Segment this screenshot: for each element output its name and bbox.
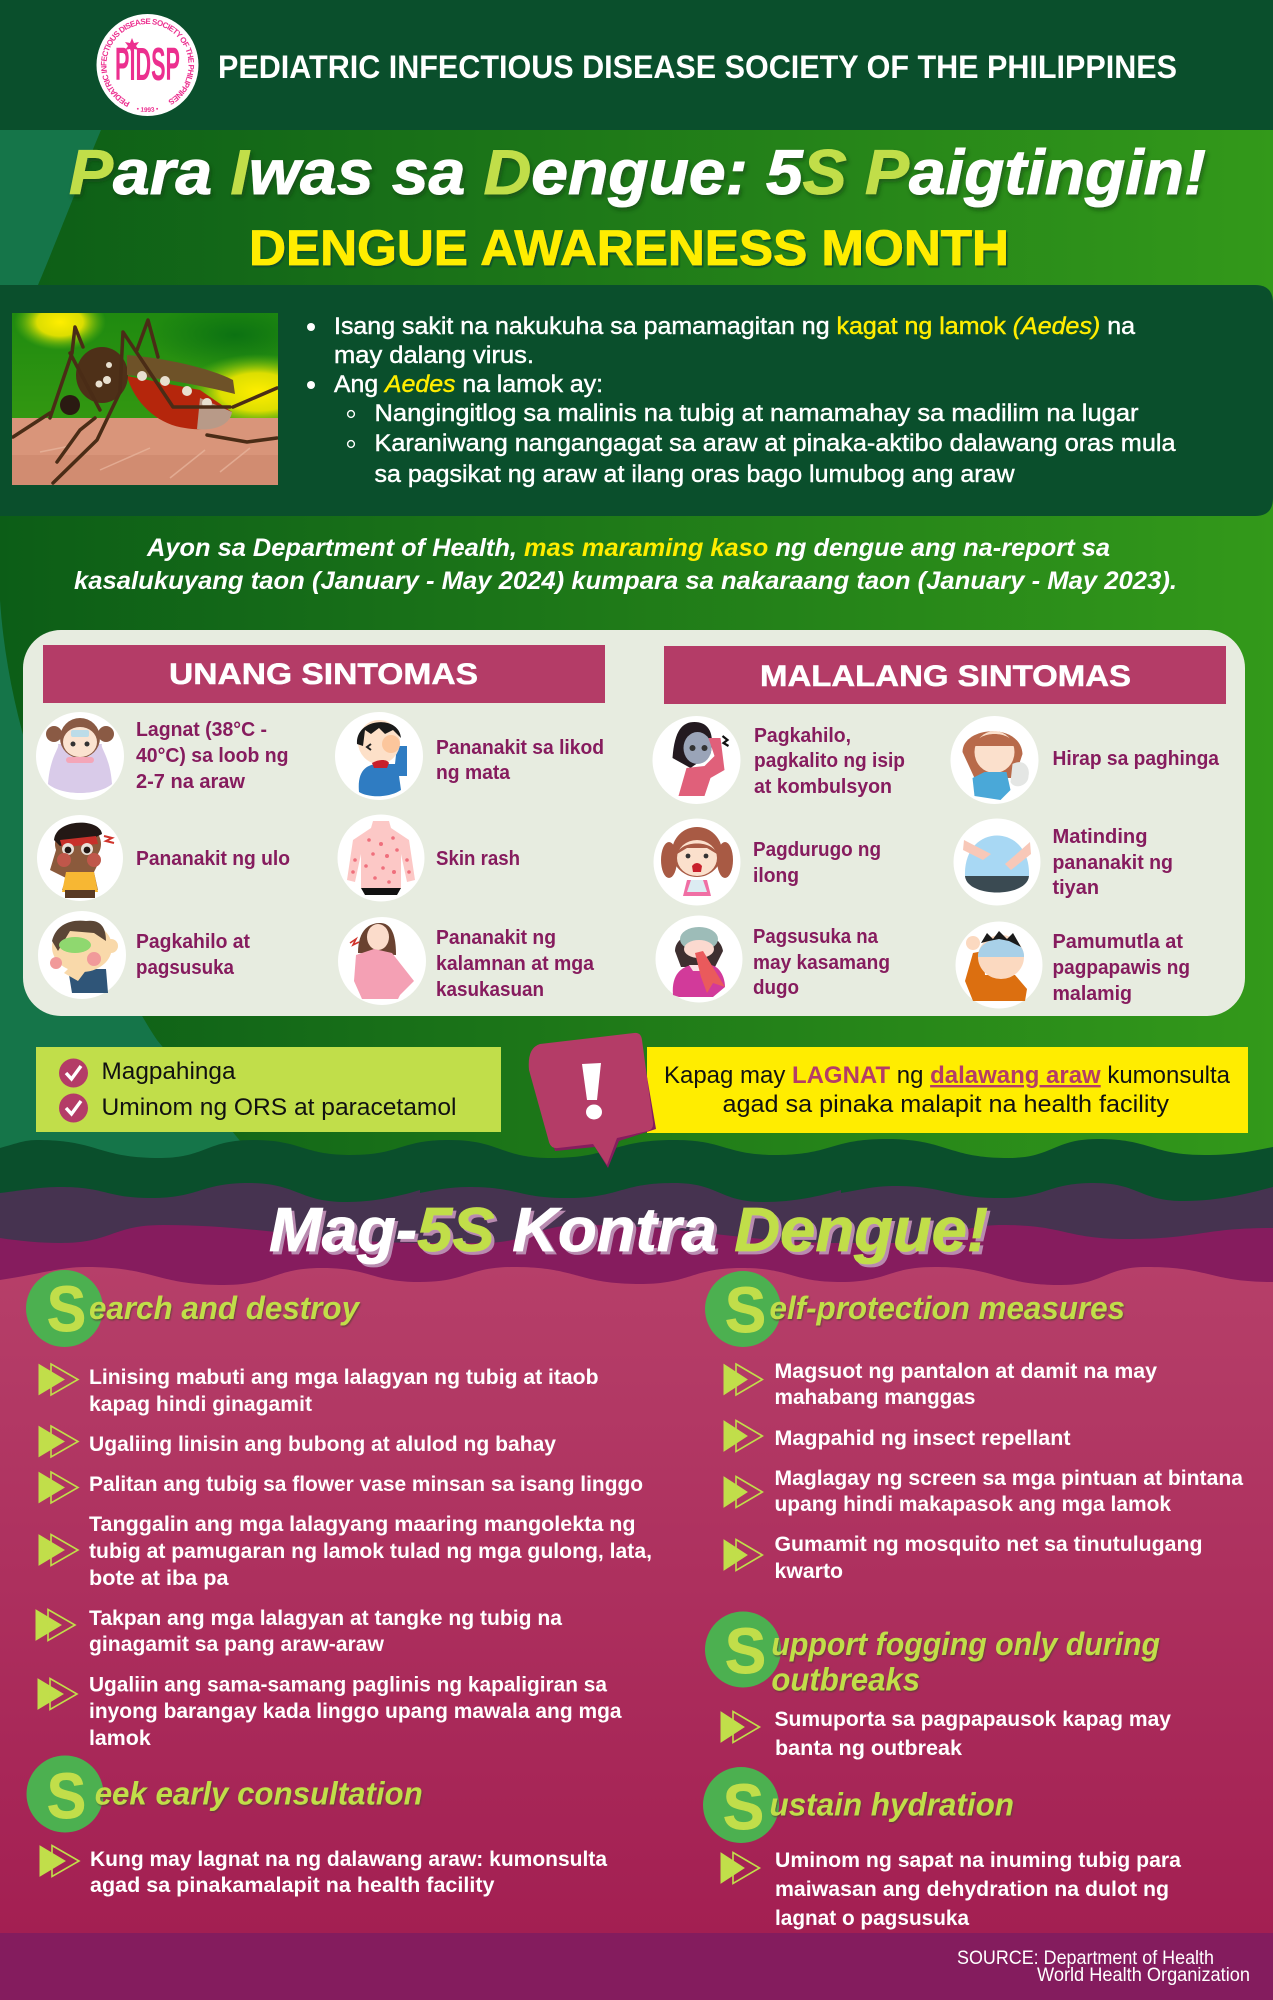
bullet text: banta ng outbreak [775, 1737, 962, 1760]
text: nosebleed [753, 838, 881, 887]
text: pain behind the eyes [436, 736, 604, 784]
heading: outbreaks [771, 1662, 920, 1698]
wave: dark purple [0, 1183, 1273, 1400]
bullet text: Magsuot ng pantalon at damit na may [774, 1360, 1157, 1383]
panel: what is dengue [0, 285, 1273, 516]
bullet list: may dalang virus. [334, 342, 534, 369]
heading [771, 1626, 1160, 1698]
bullet text: kapag hindi ginagamit [89, 1393, 312, 1416]
section: seek early consultation [26, 1756, 607, 1897]
bullet text: Ugaliin ang sama-samang paglinis ng kapaligiran sa [89, 1674, 607, 1696]
icon: S badge: S [47, 1273, 86, 1345]
icon: arrow [40, 1846, 79, 1876]
heading: elf-protection measures [770, 1290, 1125, 1326]
icon: boy with nausea [38, 911, 126, 999]
bullet text: inyong barangay kada linggo upang mawala ang mga [89, 1700, 622, 1723]
icon: arrow [721, 1852, 760, 1884]
icon: S badge: S [725, 1274, 766, 1346]
icon: girl with nosebleed [654, 818, 740, 906]
text: skin rash: Skin rash [436, 847, 520, 870]
icon: skin rash shirt [338, 814, 424, 902]
text: fever: 2-7 na araw [136, 770, 245, 793]
icons: arrows [36, 1364, 78, 1710]
bullet list: Isang sakit na nakukuha sa pamamagitan ng kagat ng lamok (Aedes) na [334, 313, 1136, 340]
bullet text [775, 1849, 1181, 1930]
bullet text: Ugaliing linisin ang bubong at alulod ng bahay [89, 1433, 556, 1456]
text: pale and cold sweat label: pagpapawis ng [1052, 956, 1190, 979]
statement: Department of Health case report: kasalukuyang taon (January - May 2024) kumpara sa nakaraang taon (January - May 2023). [74, 567, 1177, 595]
icon: boy with headache [37, 815, 123, 901]
bullet text: Uminom ng sapat na inuming tubig para [775, 1849, 1181, 1872]
text: fever: 40°C) sa loob ng [136, 744, 288, 767]
text: vomiting with blood label: may kasamang [753, 951, 890, 974]
icon: severe abdominal pain [954, 818, 1040, 906]
wave: magenta [0, 1225, 1273, 1400]
logo: PIDSP seal: PEDIATRIC INFECTIOUS DISEASE SOCIETY OF THE PHILIPPINES [100, 18, 194, 107]
heading bar: malalang sintomas: MALALANG SINTOMAS [760, 660, 1131, 693]
bullet text: bote at iba pa [89, 1567, 229, 1590]
bullet text: Sumuporta sa pagpapausok kapag may [774, 1708, 1171, 1731]
text: difficulty breathing label: Hirap sa paghinga [1052, 747, 1220, 770]
text: vomiting with blood label [753, 925, 890, 999]
text: nosebleed: Pagdurugo ng [753, 838, 881, 861]
icon: woman dizzy and confused [652, 716, 740, 804]
icon: boy with eye pain [335, 712, 423, 800]
heading: ustain hydration [770, 1787, 1014, 1823]
subtitle: DENGUE AWARENESS MONTH [249, 220, 1009, 276]
bullet text: Gumamit ng mosquito net sa tinutulugang [774, 1533, 1202, 1556]
heading bar: unang sintomas: UNANG SINTOMAS [169, 658, 478, 691]
icon: woman with muscle pain [338, 917, 426, 1005]
text: pain behind the eyes: Pananakit sa likod [436, 736, 604, 759]
logo: PIDSP seal: PIDSP [115, 38, 180, 90]
text: muscle and joint pain [436, 926, 595, 1001]
text: pain behind the eyes: ng mata [436, 761, 511, 784]
statement: Department of Health case report [74, 534, 1177, 595]
text: dizziness, confusion, seizures: Pagkahilo, [754, 724, 851, 747]
source credit: World Health Organization [1037, 1965, 1250, 1986]
section: search and destroy [26, 1270, 652, 1750]
bullet text: Maglagay ng screen sa mga pintuan at bintana [774, 1467, 1243, 1490]
wave: dark green [0, 1139, 1273, 1300]
text: pale and cold sweat label: malamig [1052, 982, 1132, 1005]
callout: home care: Magpahinga [102, 1058, 236, 1085]
icon: S badge: S [725, 1615, 766, 1687]
heading bar: unang sintomas [43, 645, 605, 703]
bullet text [90, 1848, 607, 1897]
text: dizziness, confusion, seizures [754, 724, 905, 798]
bullet text: Palitan ang tubig sa flower vase minsan sa isang linggo [89, 1473, 643, 1496]
text: nausea and vomiting: Pagkahilo at [136, 930, 250, 953]
source credit [957, 1948, 1250, 1986]
bullet list: Nangingitlog sa malinis na tubig at namamahay sa madilim na lugar [374, 400, 1138, 427]
callout: see a doctor after two days of fever [647, 1047, 1248, 1133]
icon: pale and cold sweat [956, 922, 1042, 1008]
text: severe abdominal pain label: Matinding [1052, 825, 1148, 848]
photo: Aedes mosquito [12, 313, 278, 485]
bullet list [307, 313, 1176, 488]
text: muscle and joint pain: kasukasuan [436, 978, 544, 1001]
callout: see a doctor after two days of fever: Kapag may LAGNAT ng dalawang araw kumonsulta [664, 1062, 1231, 1089]
bullet text [89, 1366, 652, 1750]
bullet list: Ang Aedes na lamok ay: [334, 371, 603, 398]
bullet text: Takpan ang mga lalagyan at tangke ng tubig na [89, 1607, 562, 1630]
icon: S badge [705, 1612, 781, 1688]
section: self-protection measures [705, 1271, 1243, 1583]
text: dizziness, confusion, seizures: pagkalito ng isip [754, 749, 905, 772]
text: nosebleed: ilong [753, 864, 799, 887]
text: vomiting with blood label: Pagsusuka na [753, 925, 879, 948]
icon: S badge [26, 1270, 103, 1347]
callout: see a doctor after two days of fever: agad sa pinaka malapit na health facility [722, 1091, 1169, 1118]
bullet text: agad sa pinakamalapit na health facility [90, 1874, 495, 1897]
text: muscle and joint pain: kalamnan at mga [436, 952, 595, 975]
bullet text: tubig at pamugaran ng lamok tulad ng mga gulong, lata, [89, 1540, 652, 1563]
text: dizziness, confusion, seizures: at kombulsyon [754, 775, 892, 798]
icon: difficulty breathing [950, 716, 1038, 804]
text: nausea and vomiting [136, 930, 250, 979]
text: severe abdominal pain label [1052, 825, 1173, 899]
text: vomiting with blood label: dugo [753, 976, 799, 999]
icons: arrows [724, 1364, 762, 1570]
icon: check [59, 1058, 88, 1088]
text: muscle and joint pain: Pananakit ng [436, 926, 556, 949]
icon: vomiting with blood [656, 916, 742, 1002]
header band [0, 0, 1273, 130]
bullet text: lagnat o pagsusuka [775, 1907, 969, 1930]
bullet text: Kung may lagnat na ng dalawang araw: kumonsulta [90, 1848, 607, 1871]
icon: check [59, 1094, 88, 1122]
text: headache: Pananakit ng ulo [136, 847, 290, 870]
bullet text: mahabang manggas [774, 1386, 976, 1409]
text: fever [136, 718, 288, 793]
icon: S badge: S [723, 1771, 764, 1843]
icon: S badge: S [47, 1760, 86, 1832]
source credit: SOURCE: Department of Health [957, 1948, 1214, 1969]
bullet text: ginagamit sa pang araw-araw [89, 1633, 385, 1656]
bullet text: lamok [89, 1727, 151, 1750]
background: teal lower shape [0, 600, 241, 1170]
bullet text: Tanggalin ang mga lalagyang maaring mangolekta ng [89, 1513, 636, 1536]
bullet text: upang hindi makapasok ang mga lamok [774, 1493, 1171, 1516]
icon: arrow [721, 1712, 760, 1742]
bullet text: maiwasan ang dehydration na dulot ng [775, 1878, 1169, 1901]
header organisation name: PEDIATRIC INFECTIOUS DISEASE SOCIETY OF THE PHILIPPINES [218, 49, 1177, 85]
bullet text: kwarto [774, 1560, 843, 1583]
bullet text: Linising mabuti ang mga lalagyan ng tubig at itaob [89, 1366, 598, 1389]
logo: PIDSP seal: • 1993 • [136, 107, 158, 112]
statement: Department of Health case report: Ayon sa Department of Health, mas maraming kaso ng dengue ang na-report sa [146, 534, 1110, 562]
background: teal upper shape [0, 130, 101, 285]
bullet text [774, 1708, 1171, 1760]
text: fever: Lagnat (38°C - [136, 718, 267, 741]
bullet list: Karaniwang nangangagat sa araw at pinaka-aktibo dalawang oras mula [374, 430, 1176, 457]
icon: girl with fever in bed [36, 712, 124, 800]
text: severe abdominal pain label: tiyan [1052, 876, 1099, 899]
wave: pink section background [0, 1267, 1273, 1933]
icon: S badge [705, 1271, 781, 1347]
bullet text [774, 1360, 1243, 1583]
text: pale and cold sweat label [1052, 930, 1190, 1005]
heading: eek early consultation [95, 1776, 423, 1812]
icon: S badge [703, 1767, 779, 1843]
panel: symptoms [23, 630, 1245, 1016]
callout: home care: Uminom ng ORS at paracetamol [102, 1094, 456, 1121]
footer band [0, 1933, 1273, 2000]
background: green gradient [0, 130, 1273, 1190]
heading: earch and destroy [89, 1290, 361, 1326]
heading: upport fogging only during [771, 1626, 1160, 1662]
bullet list: sa pagsikat ng araw at ilang oras bago lumubog ang araw [374, 461, 1015, 488]
section: support fogging only during outbreaks [705, 1612, 1171, 1760]
bullet text: Magpahid ng insect repellant [774, 1427, 1070, 1450]
text: severe abdominal pain label: pananakit ng [1052, 851, 1173, 874]
heading bar: malalang sintomas [664, 646, 1226, 704]
section: sustain hydration [703, 1767, 1181, 1930]
icon: exclamation speech bubble [529, 1033, 656, 1168]
heading: Mag-5S Kontra Dengue: Mag-5S Kontra Dengue! [269, 1196, 988, 1265]
icon: S badge [26, 1756, 104, 1832]
callout: home care [36, 1047, 501, 1132]
main title: Para Iwas sa Dengue: 5S Paigtingin! [69, 138, 1206, 208]
text: nausea and vomiting: pagsusuka [136, 956, 235, 979]
text: pale and cold sweat label: Pamumutla at [1052, 930, 1183, 953]
